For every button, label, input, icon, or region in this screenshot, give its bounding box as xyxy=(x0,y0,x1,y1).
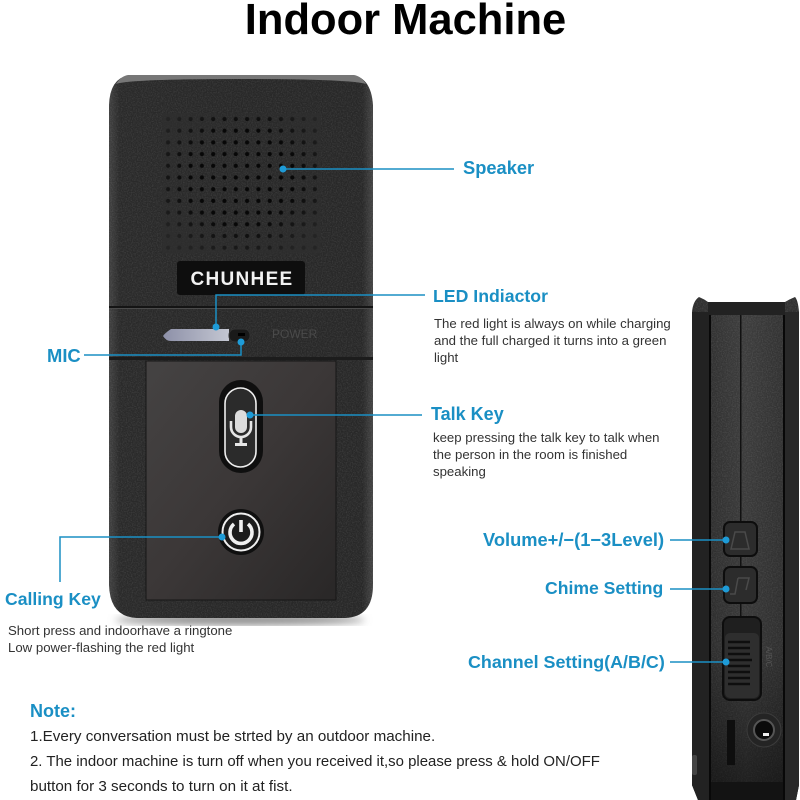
mic icon xyxy=(231,410,251,444)
speaker grille xyxy=(162,113,321,254)
label: chime: Chime Setting xyxy=(545,578,663,598)
mic hole xyxy=(229,329,250,342)
label: speaker: Speaker xyxy=(463,157,534,178)
calling key xyxy=(218,509,264,555)
power label: POWER xyxy=(272,327,318,341)
label: MIC: MIC xyxy=(47,345,81,366)
text: calling key description: Low power-flashing the red light xyxy=(8,640,194,655)
side body xyxy=(692,297,799,800)
button panel xyxy=(146,361,336,600)
text: LED description: and the full charged it turns into a green xyxy=(434,333,666,348)
label: LED: LED Indiactor xyxy=(433,286,548,306)
label: channel: Channel Setting(A/B/C) xyxy=(468,652,665,672)
brand badge xyxy=(177,261,305,295)
text: talk key description xyxy=(433,430,660,479)
side notch xyxy=(692,755,697,775)
channel slider xyxy=(723,617,773,700)
side slot xyxy=(727,720,735,765)
note text: 2. The indoor machine is turn off when you received it,so please press & hold ON/OFF xyxy=(30,753,600,770)
audio jack xyxy=(747,713,781,747)
note block xyxy=(30,701,600,795)
seam band xyxy=(109,306,373,360)
text: LED description: The red light is always on while charging xyxy=(434,316,671,331)
side device xyxy=(692,297,799,800)
volume button xyxy=(724,522,757,556)
channel slider: A/B/C xyxy=(764,647,773,668)
note text: 1.Every conversation must be strted by an outdoor machine. xyxy=(30,728,435,745)
LED window xyxy=(163,329,229,341)
text: talk key description: keep pressing the talk key to talk when xyxy=(433,430,660,445)
talk key xyxy=(219,380,263,473)
note heading: Note: xyxy=(30,701,76,721)
leader lines xyxy=(60,169,726,662)
brand badge: CHUNHEE xyxy=(190,269,294,290)
front device xyxy=(109,75,373,625)
text: talk key description: the person in the room is finished xyxy=(433,447,627,462)
note text xyxy=(30,728,600,795)
label: volume: Volume+/−(1−3Level) xyxy=(483,529,664,550)
device shadow xyxy=(115,615,365,625)
leader dots xyxy=(212,166,730,666)
text: calling key description: Short press and indoorhave a ringtone xyxy=(8,623,232,638)
text: LED description xyxy=(434,316,671,365)
label: calling key: Calling Key xyxy=(5,589,101,609)
note text: button for 3 seconds to turn on it at fist. xyxy=(30,778,293,795)
text: talk key description: speaking xyxy=(433,464,486,479)
label: talk key: Talk Key xyxy=(431,404,504,424)
device body xyxy=(109,75,373,618)
text: LED description: light xyxy=(434,350,458,365)
text: calling key description xyxy=(8,623,232,655)
chime button xyxy=(724,567,757,603)
